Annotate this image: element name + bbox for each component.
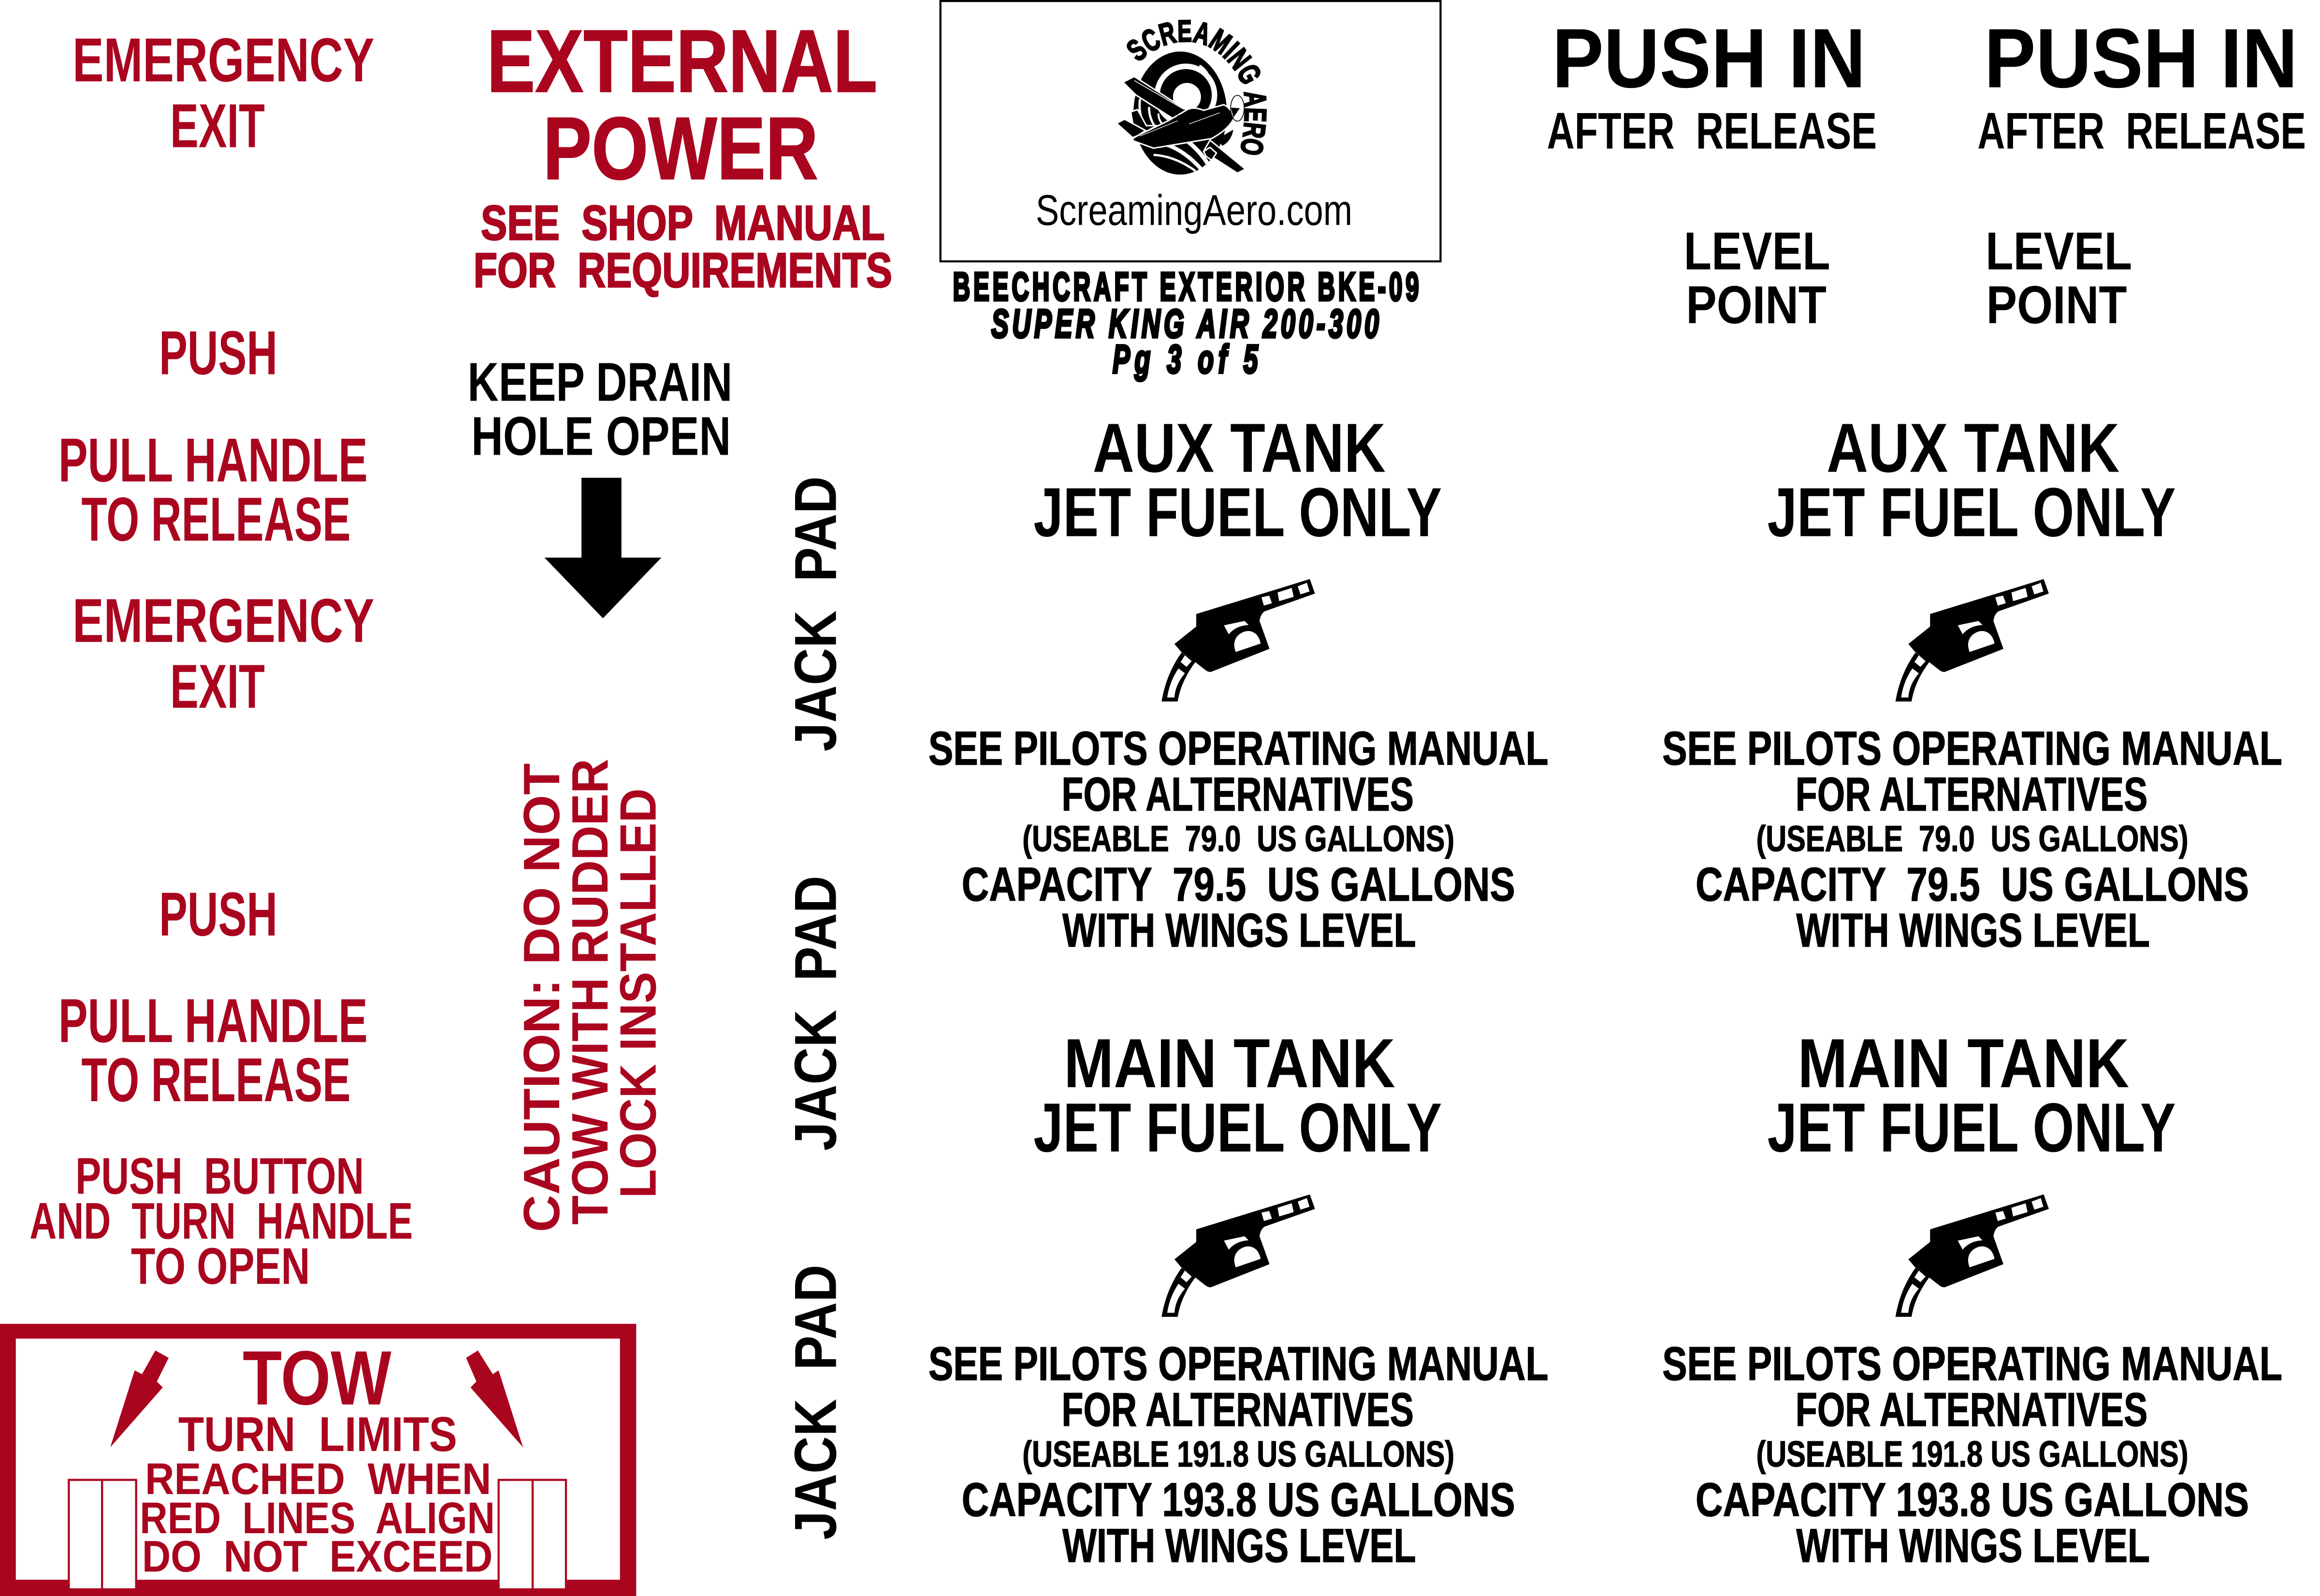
fuel notes: WITH WINGS LEVEL [1062,1519,1416,1572]
black placard: push in after release (right) [1977,11,2306,160]
black placard: keep drain hole open [467,352,732,467]
icon: left tow arrow [110,1351,169,1447]
black placard: push in after release (left): PUSH IN [1552,11,1866,105]
icon: fuel nozzle [1161,1194,1315,1317]
red placard: push (top): PUSH [159,318,277,388]
fuel notes: FOR ALTERNATIVES [1061,1383,1414,1436]
panel: aux tank placard (right) [1662,410,2282,957]
fuel notes: WITH WINGS LEVEL [1062,904,1416,957]
shop manual requirement note: FOR REQUIREMENTS [474,244,892,298]
right alignment marker [499,1480,566,1589]
red rotated caution text: CAUTION: DO NOT [513,763,570,1232]
black placard: level point (right): LEVEL [1986,222,2132,281]
red placard: emergency exit (top) [72,26,374,161]
red placard: emergency exit (top): EMERGENCY [72,26,374,95]
jack pad label 1: JACK PAD [783,476,849,751]
black placard: level point (left) [1684,222,1830,335]
panel: main tank placard (right): MAIN TANK [1798,1025,2129,1102]
red placard: pull handle to release (top): PULL HANDLE [58,426,368,495]
icon: right tow arrow [466,1351,523,1447]
icon: fuel nozzle [1161,579,1315,702]
black placard: push in after release (right): PUSH IN [1984,11,2298,105]
panel: main tank placard (right): JET FUEL ONLY [1768,1089,2176,1166]
red placard: pull handle to release (top) [58,426,368,554]
red placard: push button and turn handle to open: AND TURN HANDLE [29,1192,413,1250]
red placard: push button and turn handle to open: PUSH BUTTON [75,1147,364,1205]
black placard: keep drain hole open: HOLE OPEN [471,405,731,467]
arrow: drain down arrow [545,478,661,618]
sheet title block: SUPER KING AIR 200-300 [991,301,1379,346]
tow placard text: TURN LIMITS [178,1408,457,1462]
fuel notes [1662,722,2282,957]
logo: swirl, airplane and arc text: SCREAMING AERO [1127,19,1267,155]
panel: tow turn limits placard [0,1324,636,1596]
tow placard text: DO NOT EXCEED [142,1532,493,1581]
website address: ScreamingAero.com [1036,186,1352,234]
red rotated caution text [513,759,667,1232]
sheet title block: Pg 3 of 5 [1113,337,1258,381]
tow placard text: RED LINES ALIGN [140,1494,495,1543]
tow placard text [140,1335,495,1581]
jack pad label 3: JACK PAD [783,1265,849,1540]
panel: aux tank placard (left): AUX TANK [1093,410,1386,487]
panel: aux tank placard (left): JET FUEL ONLY [1033,474,1442,551]
black placard: level point (left): POINT [1686,275,1827,335]
fuel notes [1662,1337,2282,1572]
red placard: push button and turn handle to open: TO OPEN [131,1237,310,1295]
fuel notes: (USEABLE 79.0 US GALLONS) [1022,819,1454,859]
red rotated caution text: LOCK INSTALLED [610,789,667,1198]
left alignment marker [69,1480,136,1589]
panel: main tank placard (right) [1662,1025,2282,1572]
panel: aux tank placard (right): JET FUEL ONLY [1768,474,2176,551]
jack pad label 2: JACK PAD [783,876,849,1151]
red heading: external power: POWER [543,99,818,198]
fuel notes: WITH WINGS LEVEL [1796,1519,2150,1572]
panel: main tank placard (left): JET FUEL ONLY [1033,1089,1442,1166]
red placard: emergency exit (middle): EXIT [170,652,265,721]
fuel notes: (USEABLE 191.8 US GALLONS) [1756,1434,2189,1474]
panel: aux tank placard (right): AUX TANK [1827,410,2119,487]
icon: fuel nozzle [1896,1194,2049,1317]
red heading: external power [474,12,892,298]
panel: screaming aero logo box [940,0,1442,263]
fuel notes: (USEABLE 79.0 US GALLONS) [1756,819,2189,859]
fuel notes: SEE PILOTS OPERATING MANUAL [928,1337,1549,1390]
red placard: emergency exit (middle) [72,587,374,721]
fuel notes: FOR ALTERNATIVES [1061,768,1414,821]
panel: main tank placard (left): MAIN TANK [1064,1025,1395,1102]
panel: aux tank placard (left) [928,410,1549,957]
black placard: level point (left): LEVEL [1684,222,1830,281]
fuel notes: SEE PILOTS OPERATING MANUAL [928,722,1549,775]
red placard: pull handle to release (lower): PULL HANDLE [58,987,368,1056]
fuel notes: WITH WINGS LEVEL [1796,904,2150,957]
shop manual requirement note [474,196,892,298]
fuel notes [928,1337,1549,1572]
black placard: push in after release (left) [1547,11,1877,160]
fuel notes: FOR ALTERNATIVES [1796,1383,2147,1436]
red placard: emergency exit (top): EXIT [170,92,265,161]
red placard: pull handle to release (top): TO RELEASE [81,485,351,554]
sheet title block [953,264,1419,381]
icon: fuel nozzle [1896,579,2049,702]
red placard: push (lower): PUSH [159,880,277,949]
fuel notes: FOR ALTERNATIVES [1796,768,2147,821]
fuel notes: (USEABLE 191.8 US GALLONS) [1022,1434,1454,1474]
tow placard text: TOW [243,1335,392,1421]
black placard: keep drain hole open: KEEP DRAIN [467,352,732,413]
fuel notes: CAPACITY 193.8 US GALLONS [962,1473,1515,1526]
red heading: external power: EXTERNAL [487,12,877,111]
black placard: push in after release (left): AFTER RELEASE [1547,102,1877,160]
shop manual requirement note: SEE SHOP MANUAL [481,196,885,250]
sheet title block: BEECHCRAFT EXTERIOR BKE-09 [953,264,1419,309]
red placard: pull handle to release (lower) [58,987,368,1115]
fuel notes: CAPACITY 79.5 US GALLONS [962,858,1515,911]
red placard: pull handle to release (lower): TO RELEASE [81,1046,351,1115]
fuel notes [928,722,1549,957]
tow placard text: REACHED WHEN [145,1454,491,1504]
black placard: level point (right) [1986,222,2132,335]
black placard: level point (right): POINT [1986,275,2127,335]
panel: main tank placard (left) [928,1025,1549,1572]
red placard: emergency exit (middle): EMERGENCY [72,587,374,656]
red rotated caution text: TOW WITH RUDDER [562,759,619,1225]
red placard: push button and turn handle to open [29,1147,413,1295]
